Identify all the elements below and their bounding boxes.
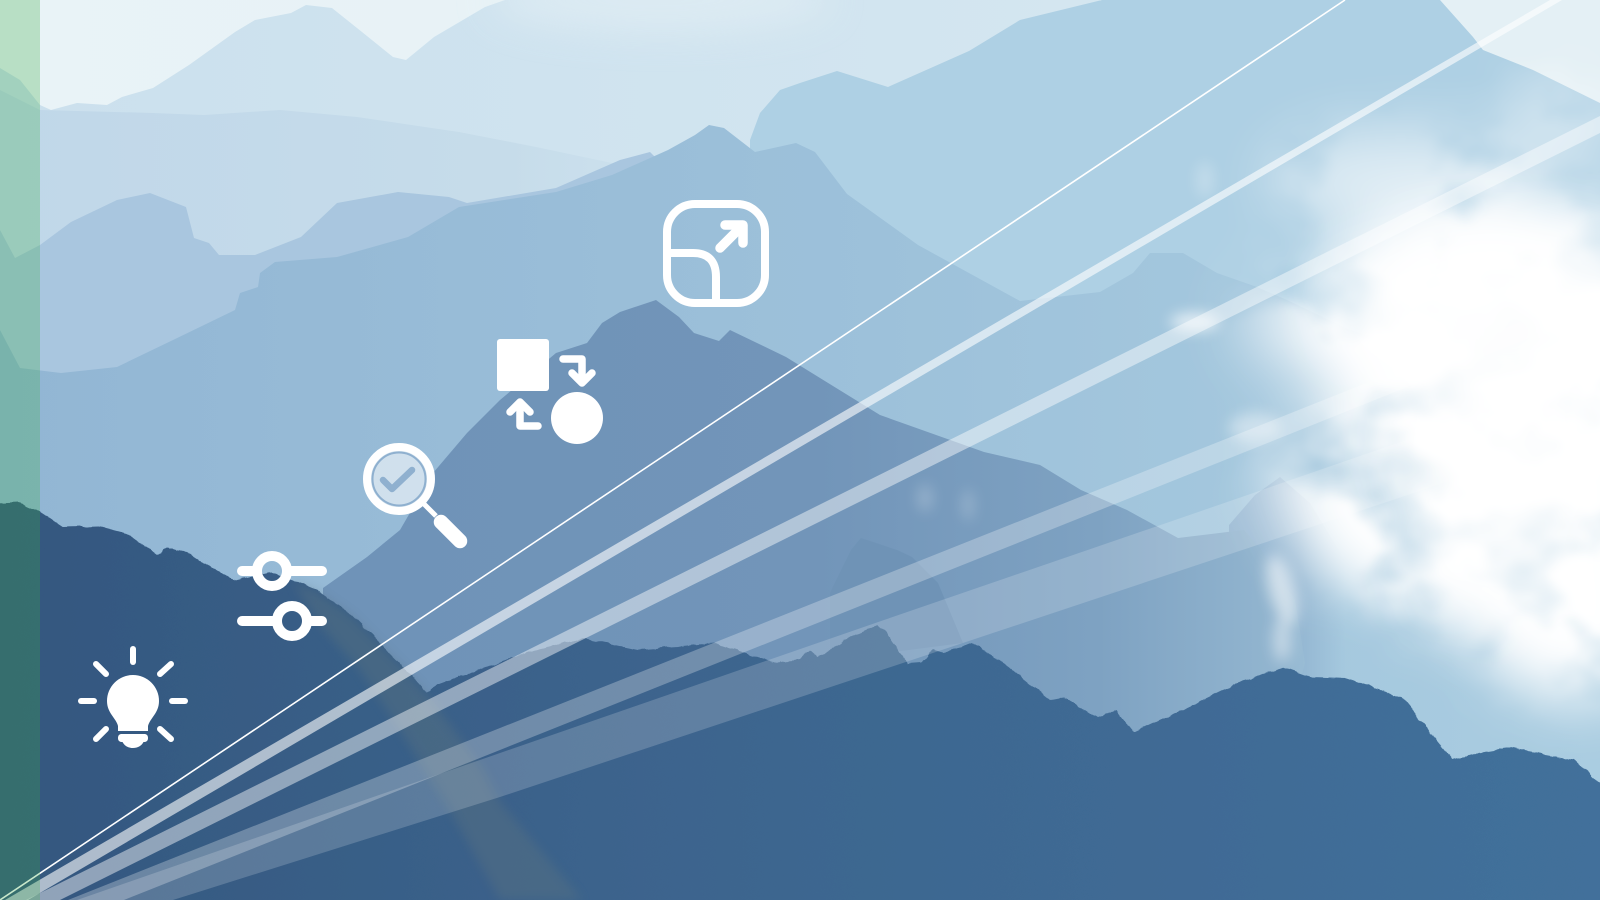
icon: magnifier with check xyxy=(367,447,460,541)
icon: expand / scale up xyxy=(667,204,765,303)
icon: light bulb xyxy=(81,649,185,748)
left green strip xyxy=(0,0,40,900)
clouds xyxy=(917,70,1600,700)
icon: square and circle swap xyxy=(497,339,603,444)
icon: sliders xyxy=(242,556,322,636)
